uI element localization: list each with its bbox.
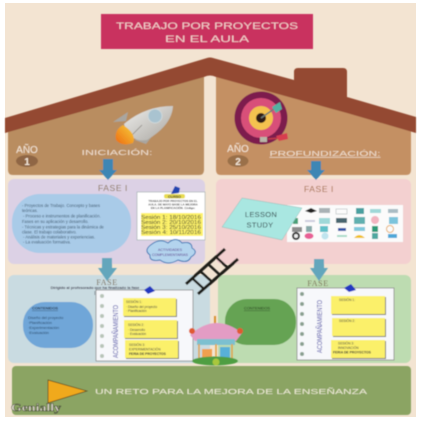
note: sesión 2 [124, 320, 178, 339]
note: lesson study: LESSON [245, 210, 277, 219]
note: sesión 2: SESIÓN 2: [128, 322, 144, 327]
heading: fase: FASE [96, 278, 118, 287]
panel: fase I year 1 [8, 179, 205, 264]
note: sesión 2: · Desarrollo [128, 328, 145, 332]
panel: fase II year 1 [8, 275, 210, 363]
callout: cloud [147, 240, 195, 263]
note: sesión 3: EXPERIMENTACIÓN [129, 346, 161, 352]
text block: contents blob: Fases en su aplicación y desarrollo. [22, 219, 89, 224]
notebook: curso sessions: Sesión 3: 25/10/2016 [141, 225, 201, 231]
illustration: carousel [189, 316, 243, 366]
label: año 1: 1 [24, 157, 30, 168]
panel: fase I year 2 [216, 179, 411, 264]
label: año 2 [227, 142, 249, 168]
note: sesión 1: SESIÓN 1: [126, 299, 142, 304]
icon grid [287, 205, 403, 242]
illustration: ladder [186, 249, 238, 294]
banner: closing message [11, 366, 411, 415]
notebook: sessions: ACOMPAÑAMIENTO [111, 305, 120, 358]
notebook: curso sessions: CURSO [168, 195, 181, 199]
heading: fase I: FASE I [304, 184, 334, 194]
note: sesión 3: FERIA DE PROYECTOS [129, 352, 167, 356]
text block: contents blob: clase. El trabajo colaborativo. [22, 230, 77, 234]
arrow: fase I to fase II year 2 [310, 259, 328, 281]
notebook: sessions [297, 284, 394, 360]
note: lesson study [222, 198, 302, 240]
note: sesión 2: · Evaluación [128, 332, 146, 336]
title banner [101, 14, 313, 49]
label: año 2: 2 [235, 157, 241, 168]
notebook: sessions: ACOMPAÑAMIENTO [315, 300, 324, 353]
panel: year 1 wall [8, 72, 204, 175]
title banner: EN EL AULA [165, 34, 250, 45]
icon: dartboard target [234, 92, 288, 144]
heading: profundización: PROFUNDIZACIÓN: [270, 149, 381, 158]
notebook: sessions [96, 286, 193, 361]
title banner: TRABAJO POR PROYECTOS [116, 21, 298, 32]
label: año 2: AÑO [227, 142, 249, 155]
text block: contents blob: - La evaluación formativa. [23, 240, 71, 244]
roof with chimney [5, 58, 416, 133]
note: sesión 3: SESIÓN 3: [338, 340, 354, 346]
icon: rocket [113, 106, 173, 144]
text block: contents blob: - Análisis de materiales y experiencias. [23, 234, 95, 240]
note: sesión 1: SESIÓN 1: [339, 297, 355, 302]
label: año 1: AÑO [16, 143, 38, 156]
blob: contenidos: ·Experimentación [28, 325, 59, 330]
note: sesión 3 [331, 340, 386, 359]
notebook: curso sessions: Sesión 1: 18/10/2016 [141, 215, 201, 221]
panel: fase II year 2 [218, 275, 411, 363]
blob: contenidos: CONTENIDOS [244, 306, 270, 310]
blob: contenidos: Diseño del proyecto [28, 315, 64, 320]
text block: contents blob: - Proceso e instrumentos de planificación. [23, 214, 101, 218]
blob: contenidos [23, 302, 93, 348]
note: sesión 3: SESIÓN 3: [129, 342, 145, 347]
icon: orange flag [48, 380, 87, 403]
heading: iniciación: INICIACIÓN: [82, 148, 152, 157]
blob: contenidos: ·Evaluación [28, 330, 49, 335]
blob: contenidos: ·Planificación [28, 320, 52, 325]
label: año 1 [16, 143, 38, 168]
banner: closing message: UN RETO PARA LA MEJORA DE LA ENSEÑANZA [95, 387, 367, 396]
logo: genially watermark: Genially [11, 402, 62, 414]
note: sesión 3 [125, 340, 179, 359]
heading: fase I: FASE I [98, 183, 128, 193]
notebook: curso sessions: TRABAJO POR PROYECTOS EN EL [148, 199, 198, 203]
text block: contents blob: teóricas. [22, 208, 38, 213]
arrow: year 1 to fase I [99, 159, 117, 180]
text block: fase note: Dirigido al profesorado que ha finalizado la fase [51, 285, 140, 290]
note: sesión 1: · Diseño del proyecto [126, 305, 157, 309]
note: sesión 3: INNOVACIÓN [338, 345, 359, 350]
text block: contents blob: - Técnicas y estrategias para la dinámica de [22, 224, 105, 230]
callout: cloud: COMPLEMENTARIAS [152, 253, 189, 257]
note: sesión 2: SESIÓN 2: [339, 318, 355, 323]
panel: year 2 wall [216, 72, 411, 175]
blob: contenidos [225, 299, 296, 345]
note: sesión 1 [123, 298, 177, 317]
text block: contents blob [12, 194, 131, 253]
callout: cloud: ACTIVIDADES [158, 248, 183, 252]
note: sesión 3: FERIA DE PROYECTOS [333, 350, 372, 354]
notebook: curso sessions: EN LA PLANIFICACIÓN. Código: [151, 205, 195, 210]
note: lesson study: STUDY [247, 220, 273, 230]
text block: contents blob: - Proyectos de Trabajo. Concepto y bases [22, 203, 100, 208]
arrow: fase I to fase II year 1 [98, 258, 117, 281]
notebook: curso sessions: Sesión 2: 20/10/2016 [141, 220, 201, 226]
panel: fase II year 1: II [94, 291, 98, 297]
notebook: curso sessions [137, 186, 205, 240]
blob: contenidos: CONTENIDOS [32, 306, 58, 310]
arrow: year 2 to fase I [307, 161, 325, 180]
notebook: curso sessions: Sesión 4: 10/11/2016 [141, 230, 201, 236]
notebook: curso sessions: AULA. DE MAYO BASE LA MEJORA [148, 202, 199, 206]
heading: fase: FASE [307, 279, 329, 288]
note: sesión 1: · Planificación [126, 309, 147, 313]
